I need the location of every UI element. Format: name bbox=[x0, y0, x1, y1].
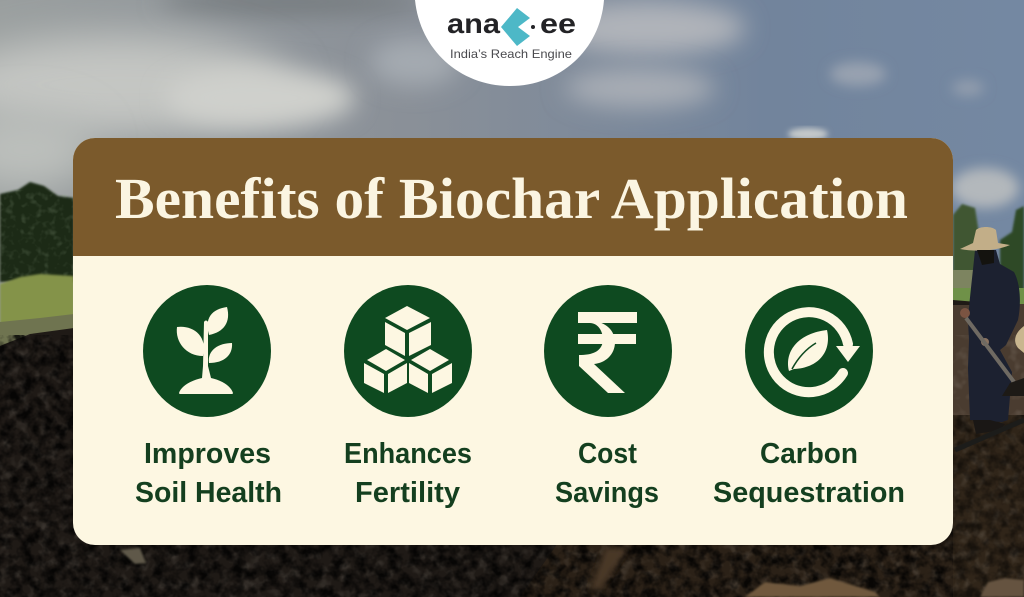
benefit: enhances fertility bbox=[344, 285, 472, 509]
label bbox=[555, 438, 659, 509]
logo tagline: India’s Reach Engine bbox=[450, 47, 572, 61]
label: Improves bbox=[144, 438, 271, 470]
label: Enhances bbox=[344, 438, 472, 470]
label: Sequestration bbox=[713, 477, 905, 509]
icon: cubes bbox=[344, 285, 472, 417]
background photo: trees and field at right bbox=[953, 204, 1024, 364]
benefit: improves soil health bbox=[135, 285, 282, 509]
label: Cost bbox=[578, 438, 637, 470]
logo dot bbox=[531, 25, 535, 29]
label bbox=[713, 438, 905, 509]
label bbox=[344, 438, 472, 509]
label: Soil Health bbox=[135, 477, 282, 509]
farmer with hat and shovel bbox=[955, 227, 1024, 450]
background photo: dark soil ground bbox=[0, 300, 1024, 597]
icon: seedling bbox=[143, 285, 271, 417]
background photo: sky and clouds bbox=[0, 0, 1024, 340]
main panel bbox=[73, 138, 953, 545]
benefit: carbon sequestration bbox=[713, 285, 905, 509]
logo badge bbox=[415, 0, 604, 86]
label: Savings bbox=[555, 477, 659, 509]
logo wordmark right: ee bbox=[540, 8, 576, 39]
icon: rupee bbox=[544, 285, 672, 417]
background photo: trees and field at left bbox=[0, 182, 74, 346]
logo wordmark left: ana bbox=[447, 8, 500, 39]
label bbox=[135, 438, 282, 509]
label: Carbon bbox=[760, 438, 858, 470]
logo diamond mark bbox=[501, 8, 530, 46]
benefit: cost savings bbox=[544, 285, 672, 509]
title: Benefits of Biochar Application bbox=[115, 166, 908, 231]
label: Fertility bbox=[355, 477, 460, 509]
icon: leaf in cycle arrow bbox=[745, 285, 873, 417]
panel header band bbox=[73, 138, 953, 256]
